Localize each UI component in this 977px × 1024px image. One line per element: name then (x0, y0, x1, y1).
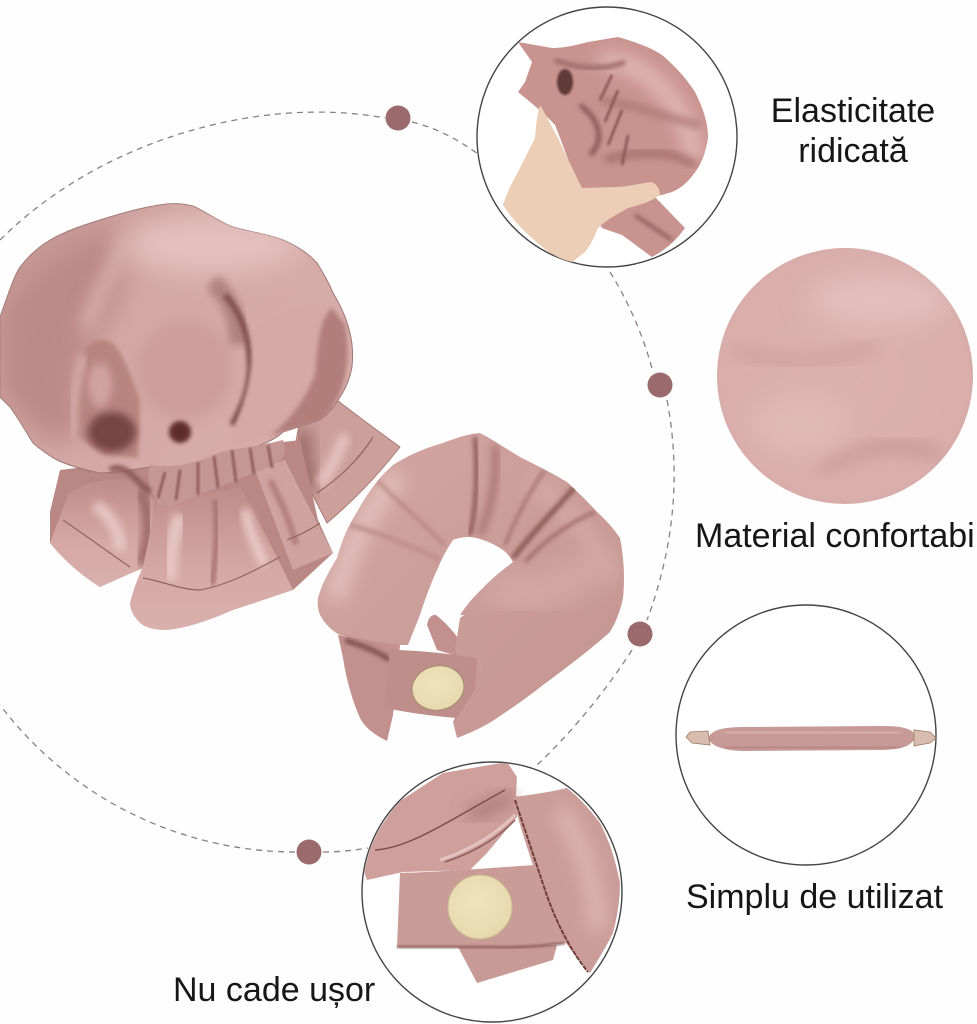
dashed orbit ring (0, 112, 674, 852)
hand (503, 105, 660, 262)
detail circle: snap detail (360, 762, 630, 1022)
right lobe (235, 343, 316, 436)
detail circle: fabric swatch (717, 248, 973, 504)
bonnet satin folds (0, 217, 348, 458)
connector dots (296, 106, 672, 864)
roll left gathered end (338, 635, 400, 741)
left darker panel (0, 225, 124, 440)
product: neck roll curler (318, 433, 624, 741)
bonnet small right ruffle (255, 460, 333, 570)
bonnet crown (0, 204, 353, 473)
right roll body (513, 788, 620, 973)
label: comfortable material: Material confortabi (695, 517, 975, 555)
product: satin bonnet (0, 204, 400, 630)
roll stitching (515, 800, 588, 972)
bonnet center front ruffle (130, 487, 293, 630)
flat curler roll (686, 726, 936, 751)
label: simple to use: Simplu de utilizat (686, 878, 944, 916)
top glossy area (120, 217, 300, 273)
label: does not fall off: Nu cade ușor (173, 971, 375, 1009)
detail circle: elasticity (477, 7, 737, 267)
dark center spot (169, 421, 191, 443)
roll end fold (455, 611, 490, 672)
dark sliver fold (212, 282, 238, 345)
bonnet left front ruffle (50, 479, 155, 587)
label: elasticity: Elasticitate (771, 92, 935, 130)
center panel (137, 320, 233, 420)
stretched bonnet (518, 37, 708, 257)
strap (397, 865, 572, 947)
roll snap strap (385, 650, 477, 718)
roll center ruffle (427, 615, 470, 660)
ruffle underlay (50, 440, 333, 590)
label: elasticity line 2: ridicată (798, 132, 908, 170)
bonnet gathered elastic (110, 440, 285, 506)
upper ruffle (360, 762, 517, 880)
lower ruffle (457, 945, 557, 983)
bonnet back right ruffle (293, 400, 400, 523)
detail circle: simple to use (676, 605, 936, 865)
snap button (448, 875, 512, 939)
roll snap button (408, 661, 468, 715)
left pocket lobe (72, 340, 140, 458)
roll satin shading (335, 437, 612, 600)
